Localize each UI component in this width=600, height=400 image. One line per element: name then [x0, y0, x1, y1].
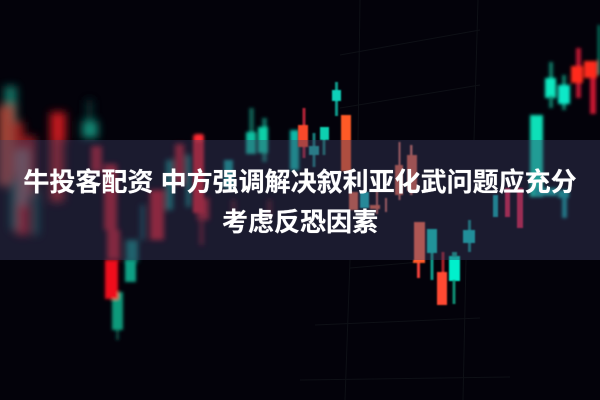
translucent title band — [0, 140, 600, 260]
title: 考虑反恐因素 — [222, 207, 378, 237]
candles: centre — [298, 82, 417, 214]
blurred candles: far left — [0, 86, 98, 235]
title: 牛投客配资 中方强调解决叙利亚化武问题应充分 — [23, 167, 577, 197]
candles: lower right — [413, 188, 523, 305]
blurred candles: left centre — [91, 144, 271, 262]
candles: upper right — [530, 25, 600, 218]
title — [23, 167, 577, 237]
